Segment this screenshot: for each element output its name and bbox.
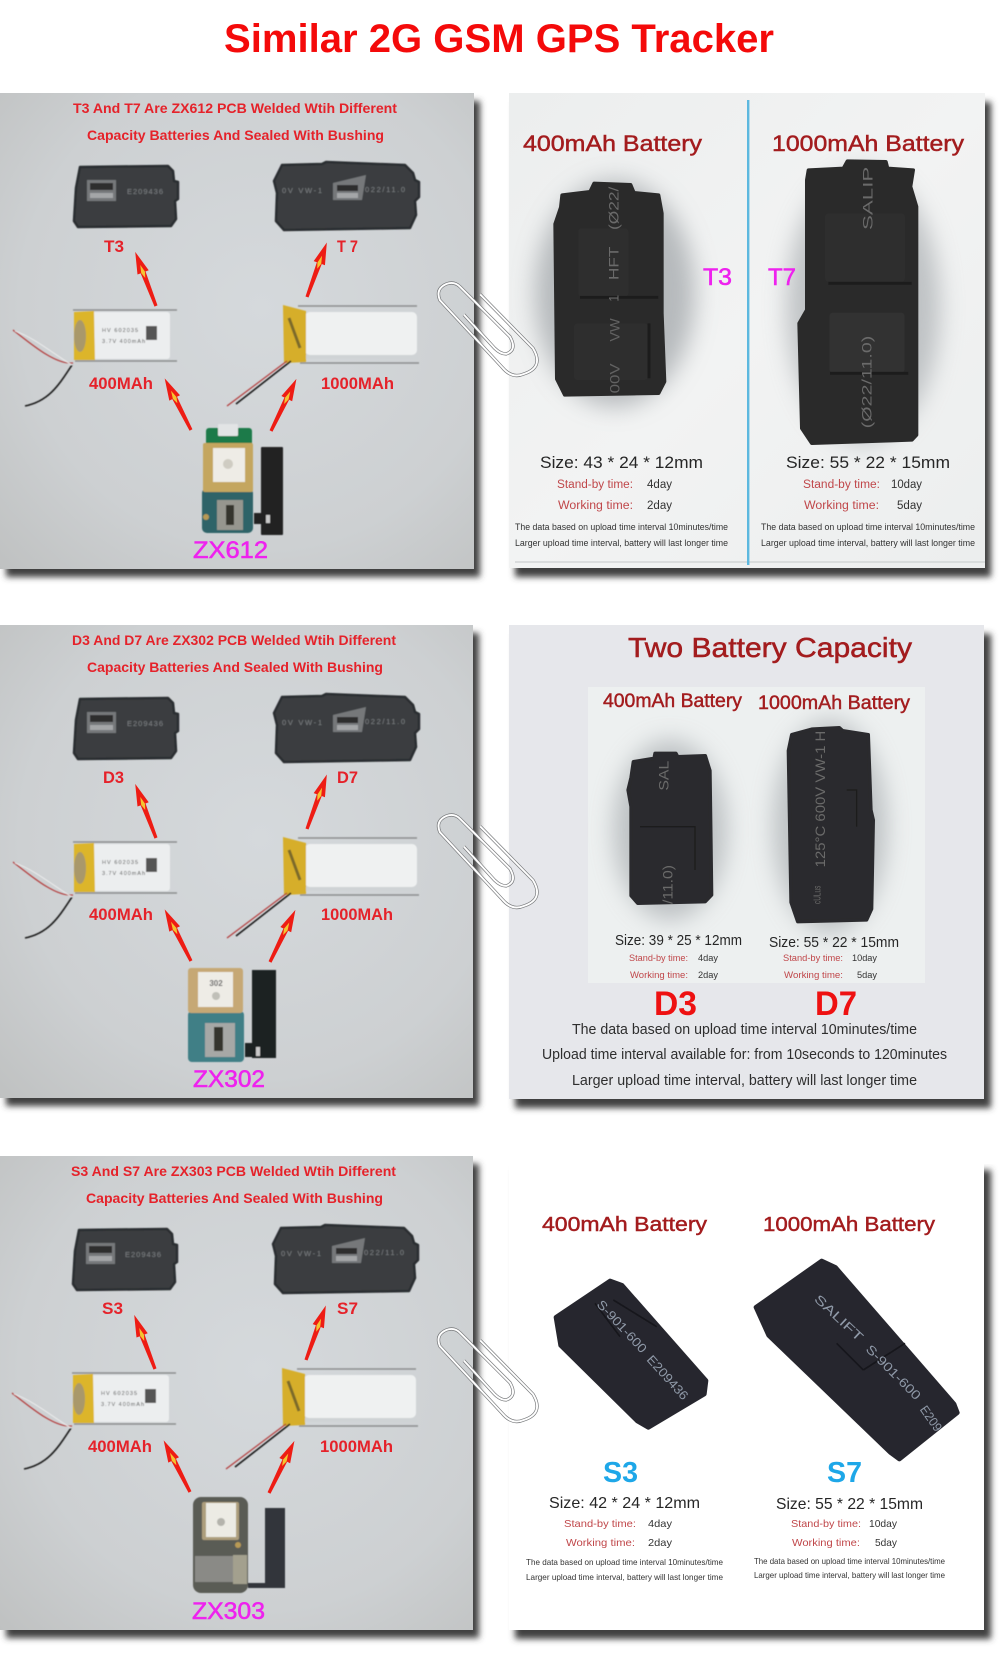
title: Similar 2G GSM GPS Tracker [224, 17, 774, 61]
specs T7 [761, 453, 975, 548]
specs D7: Size: 55 * 22 * 15mm [769, 935, 899, 951]
panel heading: T3 And T7 Are ZX612 PCB Welded Wtih Different [73, 101, 398, 116]
panel heading: D3 And D7 Are ZX302 PCB Welded Wtih Different [72, 633, 397, 648]
icon: ZX302 circuit board [188, 968, 276, 1062]
device photo D3 [628, 753, 712, 904]
label 1000MAh: 1000MAh [321, 906, 393, 924]
sealed tracker T7 [274, 162, 419, 230]
specs T3: 4day [647, 479, 672, 491]
device photo D3: SAL [655, 760, 671, 791]
device photo D7: 125°C 600V VW-1 H [812, 731, 828, 867]
sealed tracker T3: E209436 [127, 187, 163, 196]
specs D3 [615, 933, 742, 980]
panel: D3 and D7 batteries [509, 625, 991, 1108]
specs S3: 4day [648, 1518, 673, 1530]
battery 400mAh: HV 602035 [101, 1391, 137, 1397]
sealed tracker D7 [274, 694, 419, 762]
specs T7: Larger upload time interval, battery will last longer time [761, 538, 975, 548]
specs D3: Size: 39 * 25 * 12mm [615, 933, 742, 949]
label S7: S7 [337, 1300, 358, 1318]
icon: paperclip 3 [438, 1329, 537, 1422]
main heading: Two Battery Capacity [628, 632, 912, 663]
specs S7 [754, 1496, 945, 1580]
device photo S3 [556, 1281, 706, 1427]
model S7: S7 [827, 1457, 862, 1489]
specs D3: 2day [698, 970, 718, 980]
device photo T7: SALIP [860, 167, 876, 230]
label 400MAh: 400MAh [88, 1438, 152, 1456]
specs T3: Size: 43 * 24 * 12mm [540, 453, 703, 472]
sealed tracker S3 [73, 1229, 177, 1290]
specs T7: Size: 55 * 22 * 15mm [786, 453, 950, 472]
label 400MAh: 400MAh [89, 375, 153, 393]
heading 1000mAh: 1000mAh Battery [772, 131, 964, 156]
battery 1000mAh [227, 837, 419, 938]
panel heading: Capacity Batteries And Sealed With Bushing [87, 660, 383, 675]
arrow from board to 1000MAh [265, 907, 301, 965]
specs S3: Working time: [566, 1537, 635, 1549]
icon: ZX303 circuit board [193, 1497, 285, 1593]
specs D3: 4day [698, 953, 718, 963]
specs S3: Stand-by time: [564, 1518, 636, 1530]
device photo T3: (Ø22/ [605, 187, 621, 230]
specs T3: Larger upload time interval, battery will last longer time [515, 538, 728, 548]
specs S7: The data based on upload time interval 10minutes/time [754, 1556, 945, 1566]
heading 1000mAh: 1000mAh Battery [763, 1214, 935, 1236]
battery 400mAh: HV 602035 [102, 860, 138, 866]
label 1000MAh: 1000MAh [321, 375, 394, 393]
device photo S7: SALIFT [811, 1292, 866, 1345]
specs T3: 2day [647, 500, 672, 512]
specs S3 [526, 1495, 723, 1582]
sealed tracker S7: 022/11.0 [364, 1248, 404, 1257]
label 400MAh: 400MAh [89, 906, 153, 924]
footnote: Upload time interval available for: from 10seconds to 120minutes [542, 1047, 947, 1063]
label T3 magenta: T3 [703, 264, 732, 291]
heading 400mAh: 400mAh Battery [542, 1214, 707, 1236]
specs D7: 10day [852, 953, 877, 963]
device photo T7: (Ø22/11.0) [859, 336, 875, 428]
label T7: T 7 [337, 238, 358, 256]
specs T7: The data based on upload time interval 10minutes/time [761, 522, 975, 532]
panel: ZX303 assembly [0, 1156, 479, 1638]
battery 1000mAh [226, 1368, 418, 1469]
specs D7: Stand-by time: [783, 953, 843, 963]
specs T3: Stand-by time: [557, 479, 633, 491]
sealed tracker D3: E209436 [127, 719, 163, 728]
device photo S3: S-901-600 [594, 1297, 650, 1356]
sealed tracker S7: 0V VW-1 [281, 1249, 321, 1258]
specs S7: Larger upload time interval, battery will last longer time [754, 1570, 945, 1580]
label T3: T3 [104, 238, 124, 256]
device photo T3: VW [606, 318, 622, 342]
label D7: D7 [337, 769, 358, 787]
arrow from board to 400MAh [159, 376, 196, 433]
battery 400mAh [13, 310, 177, 406]
specs D3: Working time: [630, 970, 688, 980]
sealed tracker S7 [273, 1225, 418, 1293]
footnote [542, 1022, 947, 1089]
arrow to T3 [130, 250, 162, 308]
model D3: D3 [654, 985, 697, 1023]
arrow to S3 [129, 1313, 161, 1371]
sealed tracker T7: 0V VW-1 [282, 186, 322, 195]
battery 400mAh [12, 1373, 176, 1469]
arrow to T7 [301, 240, 332, 299]
specs T7: Stand-by time: [803, 479, 880, 491]
device photo S7 [756, 1261, 957, 1459]
label ZX612: ZX612 [193, 537, 268, 564]
device photo D7: cULus [813, 886, 824, 904]
heading 400mAh: 400mAh Battery [523, 131, 702, 156]
sealed tracker S3: E209436 [125, 1250, 161, 1259]
label ZX302: ZX302 [193, 1066, 265, 1093]
specs S7: Stand-by time: [791, 1518, 861, 1530]
heading 400mAh: 400mAh Battery [603, 691, 742, 712]
sealed tracker D7: 022/11.0 [365, 717, 405, 726]
specs T3: The data based on upload time interval 10minutes/time [515, 522, 728, 532]
device photo S7: S-901-600 [863, 1342, 923, 1403]
battery 400mAh: 3.7V 400mAh [101, 1402, 144, 1408]
footnote: The data based on upload time interval 10minutes/time [572, 1022, 917, 1038]
specs D7: 5day [857, 970, 877, 980]
icon: ZX302 circuit board: 302 [209, 979, 223, 988]
sealed tracker D7: 0V VW-1 [282, 718, 322, 727]
specs T3: Working time: [558, 500, 633, 512]
specs T7: 5day [897, 500, 922, 512]
icon: paperclip 2 [438, 815, 537, 908]
panel: S3 and S7 batteries [509, 1156, 1000, 1639]
heading 1000mAh: 1000mAh Battery [758, 693, 911, 714]
panel heading [72, 633, 397, 675]
arrow from board to 400MAh [159, 907, 196, 964]
divider line [747, 100, 749, 565]
panel heading: Capacity Batteries And Sealed With Bushing [87, 128, 384, 143]
specs D7 [769, 935, 899, 980]
specs D7: Working time: [784, 970, 843, 980]
specs D3: Stand-by time: [629, 953, 688, 963]
device photo S3: E209436 [644, 1353, 691, 1403]
panel: T3 and T7 batteries [509, 93, 991, 577]
specs T7: Working time: [804, 500, 879, 512]
specs S7: 10day [869, 1518, 898, 1530]
panel: ZX302 assembly [0, 625, 479, 1106]
specs T7: 10day [891, 479, 922, 491]
panel heading [73, 101, 398, 143]
label ZX303: ZX303 [192, 1598, 265, 1625]
arrow to D3 [130, 782, 162, 840]
specs S3: Larger upload time interval, battery will last longer time [526, 1572, 723, 1582]
specs S3: Size: 42 * 24 * 12mm [549, 1495, 700, 1512]
specs S3: The data based on upload time interval 10minutes/time [526, 1557, 723, 1567]
icon: paperclip 1 [438, 283, 537, 376]
specs S3: 2day [648, 1537, 673, 1549]
arrow from board to 1000MAh [264, 1438, 300, 1496]
arrow from board to 1000MAh [266, 376, 302, 434]
sealed tracker D3 [74, 698, 178, 759]
model D7: D7 [815, 985, 857, 1023]
sealed tracker T7: 022/11.0 [365, 185, 405, 194]
footnote: Larger upload time interval, battery will last longer time [572, 1073, 917, 1089]
device photo D7 [788, 728, 873, 922]
panel heading: Capacity Batteries And Sealed With Bushing [86, 1191, 383, 1206]
device photo T3: 1 [605, 295, 621, 302]
specs S7: 5day [875, 1537, 898, 1549]
device photo T7 [799, 161, 917, 443]
arrow from board to 400MAh [158, 1438, 195, 1495]
icon: ZX612 circuit board [202, 424, 283, 535]
label S3: S3 [102, 1300, 123, 1318]
panel heading [71, 1164, 397, 1206]
specs T3 [515, 453, 728, 548]
battery 400mAh: HV 602035 [102, 328, 138, 334]
device photo D3: /11.0) [660, 865, 676, 904]
label D3: D3 [103, 769, 124, 787]
panel: ZX612 assembly [0, 93, 480, 577]
device photo T3: 00V [606, 363, 622, 393]
label 1000MAh: 1000MAh [320, 1438, 393, 1456]
specs S7: Size: 55 * 22 * 15mm [776, 1496, 923, 1513]
label T7 magenta: T7 [768, 264, 796, 291]
arrow to S7 [300, 1303, 331, 1362]
panel heading: S3 And S7 Are ZX303 PCB Welded Wtih Different [71, 1164, 397, 1179]
battery 400mAh: 3.7V 400mAh [102, 871, 145, 877]
device photo T3 [555, 183, 665, 395]
model S3: S3 [603, 1457, 638, 1489]
device photo T3: HFT [605, 246, 621, 280]
device photo S7: E209 [917, 1403, 945, 1434]
specs S7: Working time: [792, 1537, 860, 1549]
battery 400mAh: 3.7V 400mAh [102, 339, 145, 345]
battery 400mAh [13, 842, 177, 938]
arrow to D7 [301, 772, 332, 831]
battery 1000mAh [227, 305, 419, 406]
sealed tracker T3 [74, 166, 178, 227]
